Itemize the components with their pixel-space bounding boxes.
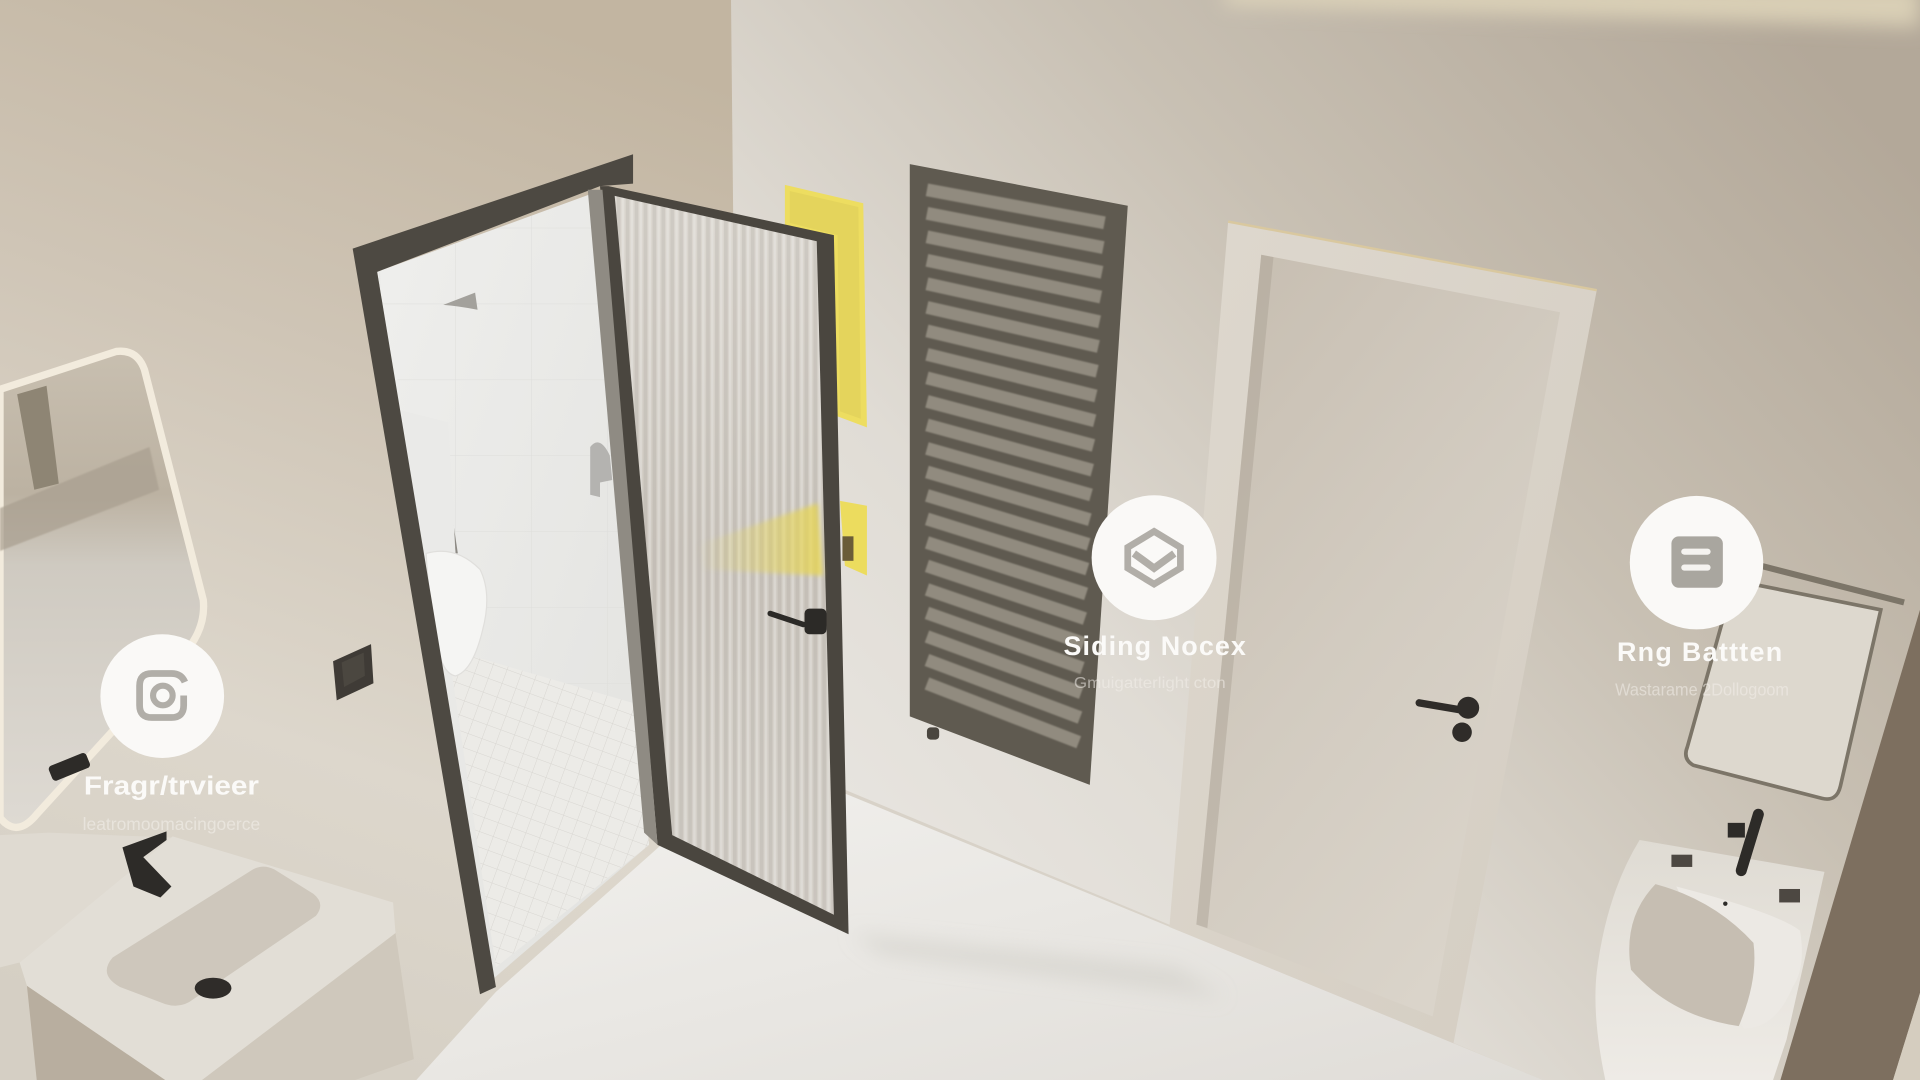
door handle xyxy=(1419,697,1479,742)
callout: left door type xyxy=(83,634,260,834)
sink and cabinet xyxy=(20,831,414,1080)
panel door with frame xyxy=(1169,222,1597,1043)
caption: leatromoomacingoerce xyxy=(83,814,260,834)
mirror xyxy=(0,351,204,827)
right wall xyxy=(731,0,1920,1080)
toilet xyxy=(402,410,487,676)
caption: Wastarame 2Dollogoom xyxy=(1615,680,1789,700)
louvered radiator door xyxy=(910,164,1128,785)
icon: ring in rounded square xyxy=(100,634,224,758)
shower mixer xyxy=(427,422,612,553)
tap xyxy=(1671,814,1800,902)
caption: Gmuigatterlight cton xyxy=(1074,675,1226,692)
glass door xyxy=(588,186,849,934)
floor shadow xyxy=(851,933,1224,998)
floor xyxy=(416,793,1543,1080)
label: Siding Nocex xyxy=(1063,631,1246,661)
bidet xyxy=(1595,814,1824,1080)
callout: middle door type xyxy=(1063,495,1246,692)
icon: hexagon with chevron xyxy=(1092,495,1217,620)
wall switch xyxy=(333,644,373,700)
callout: right door type xyxy=(1615,496,1789,700)
dark side wall strip xyxy=(1780,610,1920,1080)
dark door frame xyxy=(353,154,633,994)
towel rail and towel xyxy=(1686,563,1904,799)
icon: rounded square with bars xyxy=(1630,496,1763,629)
shower room opening xyxy=(377,190,649,980)
label: Fragr/trvieer xyxy=(84,773,259,801)
tiled wall by sink xyxy=(0,833,171,967)
left wall xyxy=(0,0,784,1080)
label: Rng Battten xyxy=(1617,637,1782,667)
door handle xyxy=(770,609,827,634)
icon: shower head xyxy=(443,293,478,310)
yellow light panel xyxy=(785,185,867,576)
